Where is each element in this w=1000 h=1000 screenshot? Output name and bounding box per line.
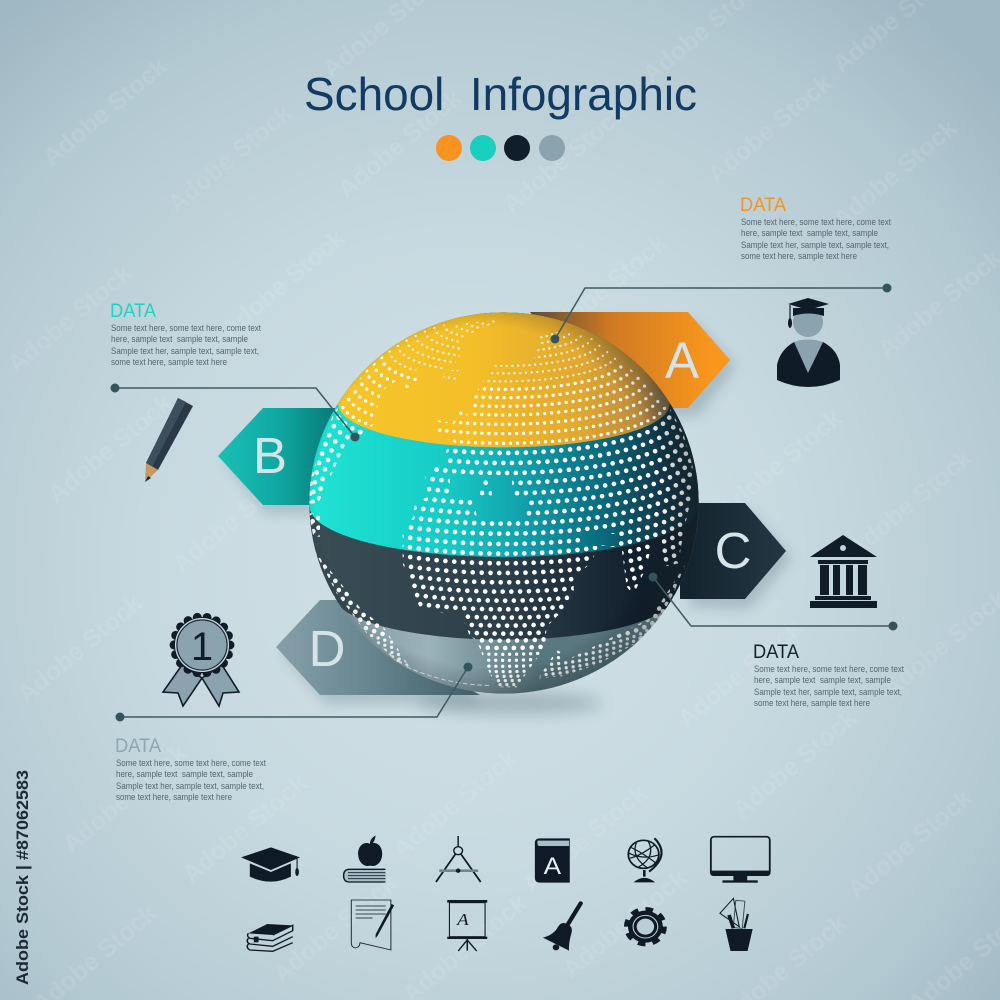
watermark pattern: Adobe Stock: [387, 744, 522, 864]
text block A: [740, 195, 891, 261]
watermark pattern: Adobe Stock: [215, 224, 350, 344]
text block C: Sample text her, sample text, sample text,: [754, 687, 902, 697]
icon: book stack: [247, 924, 293, 951]
watermark pattern: Adobe Stock: [12, 589, 147, 709]
sphere shading: [309, 312, 699, 694]
text block C: Some text here, some text here, come text: [754, 664, 904, 674]
icon: paper and pen: [351, 900, 394, 950]
watermark pattern: Adobe Stock: [712, 404, 847, 524]
icon: medal: 1: [191, 625, 213, 669]
text block B: DATA: [110, 301, 156, 322]
icon: apple on book: [344, 835, 385, 882]
text block D: DATA: [115, 736, 161, 757]
globe: [309, 312, 699, 694]
tab D: D: [309, 620, 345, 677]
icon: pencil: [145, 398, 193, 482]
watermark pattern: Adobe Stock: [842, 784, 977, 904]
watermark pattern: Adobe Stock: [842, 444, 977, 564]
band: yellow: [337, 312, 670, 448]
colour legend dots: [436, 135, 565, 161]
text block A: here, sample text sample text, sample: [741, 228, 878, 238]
icon: presentation board: [447, 900, 487, 951]
leader line C: [648, 572, 898, 630]
watermark pattern: Adobe Stock: [557, 864, 692, 984]
text block A: Some text here, some text here, come text: [741, 217, 891, 227]
icon: book A: A: [544, 853, 561, 880]
leader line D: [116, 662, 472, 722]
watermark pattern: Adobe Stock: [37, 52, 172, 172]
title: School Infographic: [304, 68, 697, 120]
icon: bell: [543, 903, 581, 951]
text block C: some text here, sample text here: [754, 698, 870, 708]
text block B: [110, 301, 261, 367]
leader line A: [550, 284, 892, 344]
watermark pattern: Adobe Stock: [497, 99, 632, 219]
text block B: Sample text her, sample text, sample text,: [111, 346, 259, 356]
watermark pattern: Adobe Stock: [267, 869, 402, 989]
dotted world map: [310, 317, 698, 688]
text block D: Sample text her, sample text, sample text,: [116, 781, 264, 791]
band: dark: [309, 312, 699, 640]
watermark pattern: Adobe Stock: [702, 69, 837, 189]
icon: monitor: [710, 837, 770, 883]
watermark pattern: Adobe Stock: [2, 259, 137, 379]
icon: gear: [627, 909, 664, 944]
icon: medal: [163, 617, 239, 706]
band: bottom grey: [309, 312, 699, 694]
text block B: here, sample text sample text, sample: [111, 334, 248, 344]
watermark pattern: Adobe Stock: [332, 84, 467, 204]
band: teal: [309, 312, 699, 557]
watermark pattern: Adobe Stock: [42, 389, 177, 509]
watermark pattern: Adobe Stock: [727, 704, 862, 824]
icon: book A: [535, 838, 570, 883]
tab D: [276, 600, 480, 704]
watermark pattern: Adobe Stock: [517, 779, 652, 899]
watermark pattern: Adobe Stock: [537, 229, 672, 349]
stock id vertical text: Adobe Stock | #87062583: [13, 770, 32, 985]
text block D: [115, 736, 266, 802]
globe ground shadow: [418, 692, 602, 714]
text block A: some text here, sample text here: [741, 251, 857, 261]
tab A: [530, 312, 736, 416]
icon: desk globe: [628, 838, 662, 882]
bottom icon set: [241, 835, 770, 951]
icon: bank: [810, 535, 877, 608]
text block A: DATA: [740, 195, 786, 216]
text block C: [753, 642, 904, 708]
tab C: [680, 503, 792, 608]
icon: pencil cup: [720, 898, 753, 951]
watermark pattern: Adobe Stock: [162, 99, 297, 219]
tab B: [218, 408, 340, 514]
text block A: Sample text her, sample text, sample text,: [741, 240, 889, 250]
watermark pattern: Adobe Stock: [167, 459, 302, 579]
tab B: B: [253, 427, 287, 484]
icon: compass: [436, 836, 481, 882]
watermark pattern: Adobe Stock: [57, 739, 192, 859]
watermark pattern: Adobe Stock: [672, 614, 807, 734]
icon: mortarboard: [241, 847, 300, 882]
text block B: some text here, sample text here: [111, 357, 227, 367]
text block C: here, sample text sample text, sample: [754, 675, 891, 685]
text block D: Some text here, some text here, come text: [116, 758, 266, 768]
tab C: C: [715, 522, 751, 579]
leader line B: [110, 384, 360, 442]
watermark pattern: Adobe Stock: [177, 769, 312, 889]
bottom limb dashes: [407, 667, 490, 685]
icon: graduate: [777, 298, 840, 387]
watermark pattern: Adobe Stock: [827, 114, 962, 234]
icon: presentation board: A: [456, 910, 470, 929]
text block B: Some text here, some text here, come text: [111, 323, 261, 333]
text block D: some text here, sample text here: [116, 792, 232, 802]
text block C: DATA: [753, 642, 799, 663]
text block D: here, sample text sample text, sample: [116, 769, 253, 779]
tab A: A: [665, 332, 699, 389]
